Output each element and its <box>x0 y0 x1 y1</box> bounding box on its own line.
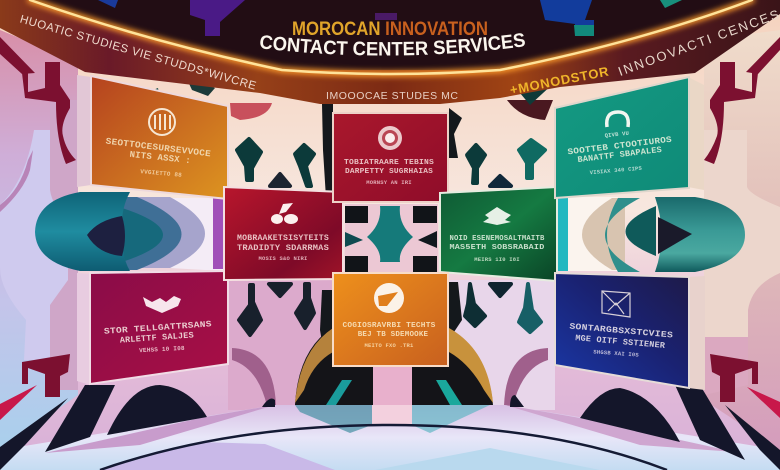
panel: top red service card <box>333 113 448 202</box>
crimson floor-edge strips <box>0 385 780 420</box>
decorative drop cut-outs, upper left <box>143 75 314 186</box>
right teal blob <box>557 197 745 272</box>
ceiling color blocks <box>98 0 682 36</box>
decorative drop cut-outs, lower right <box>465 284 541 332</box>
dark arches and wedges <box>0 385 780 470</box>
title: MOROCAN INNOVATION <box>292 19 488 40</box>
panel: teal service card: VISIAX 340 CIPS <box>589 165 643 176</box>
top ceiling and banner <box>0 0 780 104</box>
icon: red card emblem <box>271 203 298 224</box>
panel: crimson service card: VEHSS 10 I08 <box>139 345 185 354</box>
panel: navy service card: SONTARGBSXSTCVIES <box>569 321 673 341</box>
panel: top red service card: DARPETTY SUGRHAIAS <box>345 168 433 176</box>
panel: top red service card: TOBIATRAARE TEBINS <box>344 159 434 167</box>
floor <box>0 405 780 470</box>
panel: navy service card: SHGSB XAI I0S <box>593 348 640 359</box>
icon: orange card emblem <box>149 109 175 135</box>
panel: green service card: MEIRS 1I0 I8I <box>474 256 520 263</box>
panel: crimson service card <box>77 271 228 385</box>
panel: crimson service card: ARLETTF SALJES <box>119 330 194 346</box>
panel: orange service card: SEOTTOCESURSEVVOCE <box>105 137 212 159</box>
panel: teal service card <box>555 77 704 198</box>
title <box>260 19 525 56</box>
glowing light strip <box>30 0 752 74</box>
banner text: right gold: +MONODSTOR <box>509 64 610 97</box>
icon: teal card emblem <box>607 112 628 127</box>
panel: center orange service card: MEITO FXO .TR1 <box>364 342 414 349</box>
icon: green card emblem <box>483 207 511 225</box>
maroon wall brackets <box>0 37 780 402</box>
left teal blob <box>35 192 226 271</box>
panel: red service card: MOSIS S&O NIRI <box>258 255 308 262</box>
center lattice with teal hourglass <box>345 204 438 274</box>
panel: center orange service card: BEJ TB SDEMOOKE <box>358 331 429 339</box>
panel: crimson service card: STOR TELLGATTRSANS <box>104 319 212 337</box>
panel: teal service card: SOOTTEB CTOOTIUROS <box>567 135 672 157</box>
panel: orange service card: VVGIETTO 88 <box>140 168 182 179</box>
panel: red service card: TRADIDTY SDARRMAS <box>237 244 329 253</box>
title: CONTACT CENTER SERVICES <box>260 33 525 56</box>
panel: green service card <box>440 187 557 281</box>
dark vertical stripes beside center cards <box>320 104 462 366</box>
panel: top red service card: MORNSY AN IRI <box>366 179 412 186</box>
small side arches <box>232 348 548 406</box>
panel: teal service card: QIVB VU <box>604 130 629 139</box>
panel: navy service card: MGE OITF SSTIENER <box>575 333 666 351</box>
banner text: left: HUOATIC STUDIES VIE STUDDS*WIVCRE <box>18 14 258 93</box>
decorative drop cut-outs, upper right <box>467 82 555 186</box>
banner text: right: INNOOVACTI CENCES <box>616 7 780 79</box>
panel: center orange service card <box>333 273 448 366</box>
icon: center orange card emblem <box>374 283 404 313</box>
panel: orange service card <box>77 75 228 199</box>
panel: navy service card <box>555 273 705 390</box>
panel: red service card <box>224 187 343 280</box>
floor ring <box>100 425 667 470</box>
panel: green service card: MAS5ETH SOBSRABAID <box>450 244 545 252</box>
panel: center orange service card: COGIOSRAVRBI TECHTS <box>342 322 436 330</box>
panel: green service card: NOID ESENEMOSALTMAITB <box>450 235 545 243</box>
banner text: center: IMOOOCAE STUDES MC <box>326 90 458 102</box>
panel: orange service card: NITS ASSX : <box>129 150 191 166</box>
panel: teal service card: BANATTF SBAPALES <box>577 145 662 165</box>
decorative drop cut-outs, lower left <box>239 284 314 335</box>
panel: red service card: MOBRAAKETSISYTEITS <box>237 234 329 243</box>
icon: navy card emblem <box>602 291 630 317</box>
icon: crimson card emblem <box>143 296 181 313</box>
center arch with leaf border <box>295 328 493 406</box>
icon: top red card emblem <box>378 126 402 150</box>
